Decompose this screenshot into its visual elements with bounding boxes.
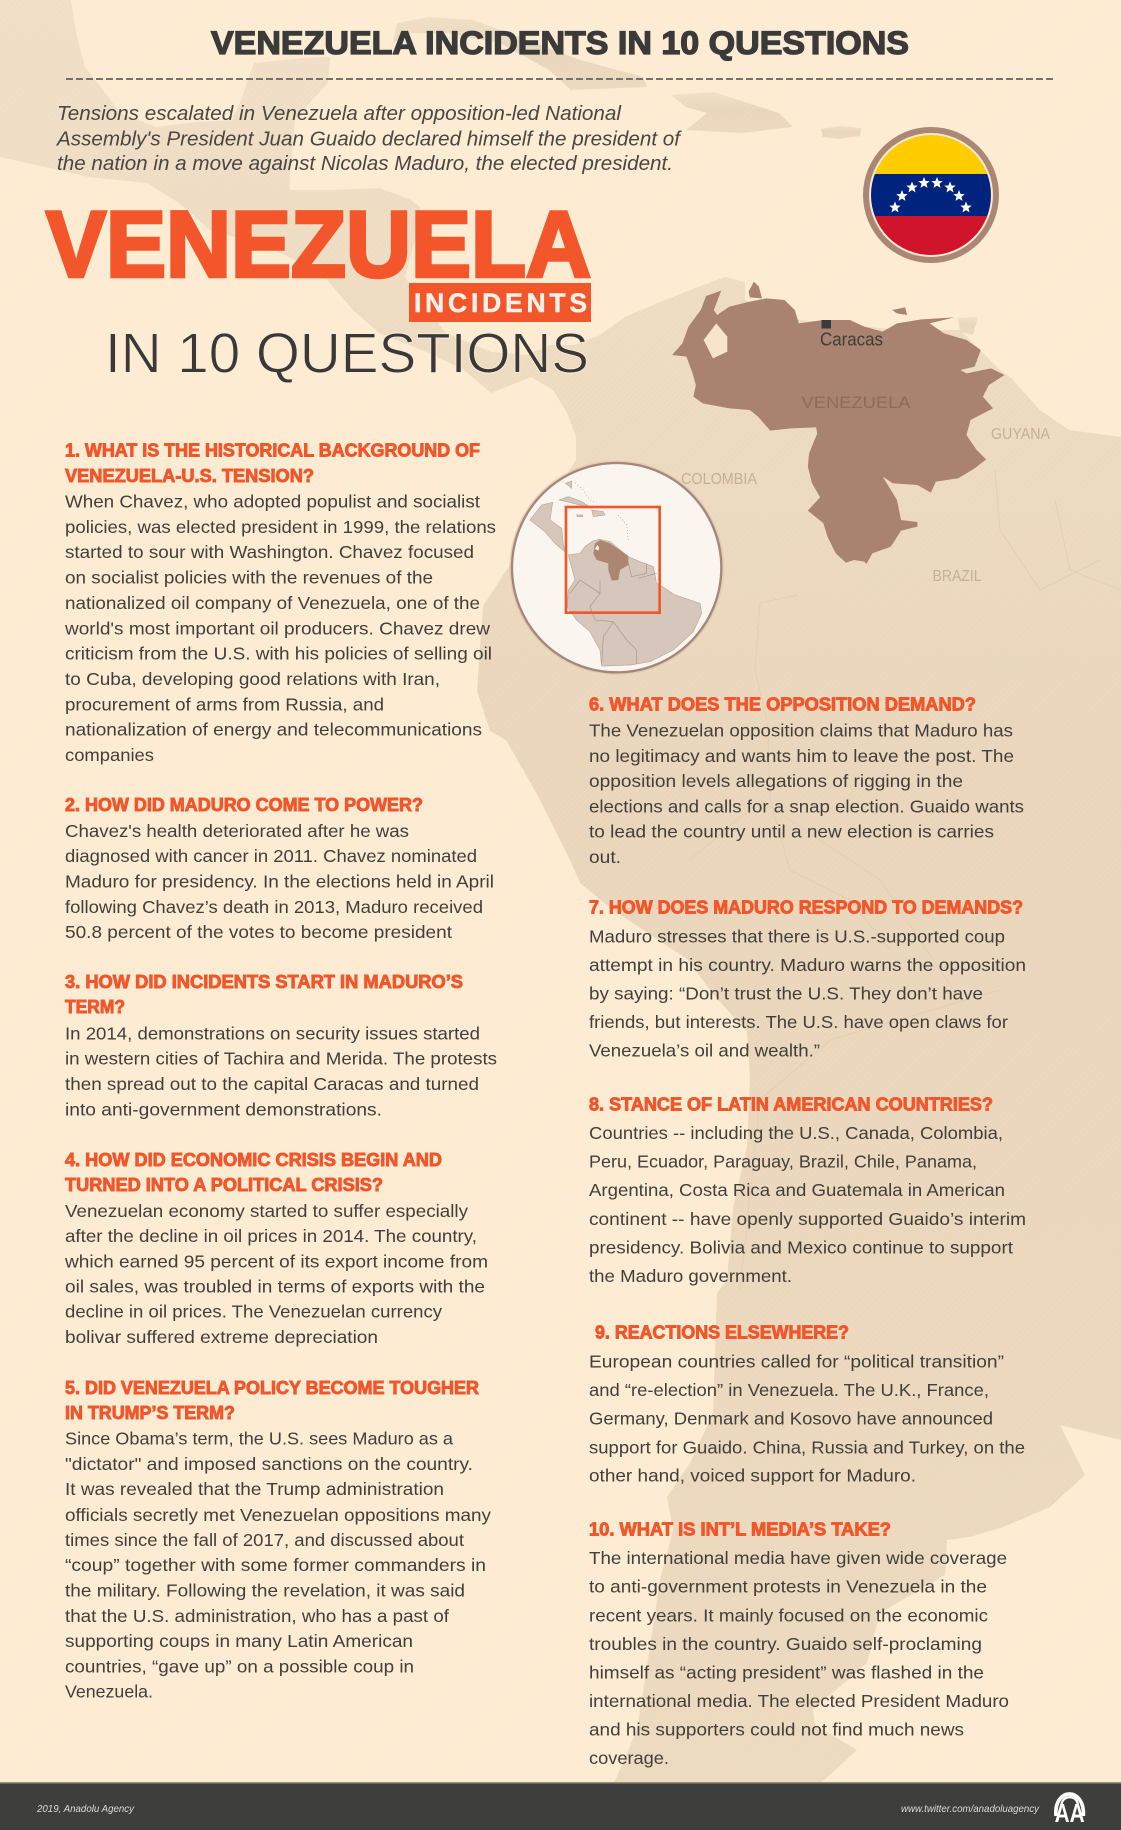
question 1: nationalized oil company of Venezuela, one of the <box>65 593 480 613</box>
footer bar <box>0 1782 1121 1830</box>
question 2: 50.8 percent of the votes to become president <box>65 922 452 942</box>
question 10 <box>589 1518 1009 1768</box>
question 1: 1. WHAT IS THE HISTORICAL BACKGROUND OF <box>65 440 480 460</box>
question 4: Venezuelan economy started to suffer especially <box>65 1201 468 1221</box>
question 5: IN TRUMP’S TERM? <box>65 1402 235 1423</box>
question 7: 7. HOW DOES MADURO RESPOND TO DEMANDS? <box>589 896 1023 917</box>
question 9: support for Guaido. China, Russia and Turkey, on the <box>589 1437 1025 1457</box>
question 6: no legitimacy and wants him to leave the post. The <box>589 746 1014 766</box>
map: Venezuela <box>672 282 1004 564</box>
question 6: elections and calls for a snap election. Guaido wants <box>589 796 1024 816</box>
label: Caracas: Caracas <box>820 330 883 350</box>
question 1: companies <box>65 745 154 765</box>
question 8: 8. STANCE OF LATIN AMERICAN COUNTRIES? <box>589 1094 993 1114</box>
question 4: 4. HOW DID ECONOMIC CRISIS BEGIN AND <box>65 1149 442 1170</box>
label: Colombia: COLOMBIA <box>681 471 758 488</box>
icon: Venezuelan flag <box>863 127 999 263</box>
question 7 <box>589 896 1026 1061</box>
question 10: and his supporters could not find much news <box>589 1719 964 1739</box>
intro text: Assembly's President Juan Guaido declared himself the president of <box>56 128 683 150</box>
question 2: 2. HOW DID MADURO COME TO POWER? <box>65 794 423 815</box>
question 4 <box>64 1149 488 1347</box>
question 2: diagnosed with cancer in 2011. Chavez nominated <box>65 846 477 866</box>
question 6: to lead the country until a new election is carries <box>589 822 994 842</box>
question 4: decline in oil prices. The Venezuelan currency <box>65 1302 442 1322</box>
intro text: Tensions escalated in Venezuela after opposition-led National <box>57 103 622 125</box>
question 2 <box>65 794 494 942</box>
footer url: www.twitter.com/anadoluagency <box>901 1803 1040 1815</box>
question 1: policies, was elected president in 1999, the relations <box>65 517 496 537</box>
question 1: criticism from the U.S. with his policies of selling oil <box>65 644 492 664</box>
question 5: Since Obama’s term, the U.S. sees Maduro as a <box>65 1429 453 1449</box>
map: country borders <box>690 470 1121 1290</box>
question 5: supporting coups in many Latin American <box>65 1631 413 1651</box>
question 5 <box>65 1377 491 1702</box>
question 6: opposition levels allegations of rigging in the <box>589 771 963 791</box>
question 10: coverage. <box>589 1748 669 1768</box>
question 1 <box>64 440 496 765</box>
question 5: the military. Following the revelation, it was said <box>65 1580 465 1600</box>
question 6: out. <box>589 847 621 867</box>
question 1: started to sour with Washington. Chavez focused <box>65 542 474 562</box>
label: Venezuela: VENEZUELA <box>802 393 911 412</box>
headline: In 10 Questions: IN 10 QUESTIONS <box>105 322 589 386</box>
title: VENEZUELA INCIDENTS IN 10 QUESTIONS <box>211 25 909 61</box>
label: Guyana: GUYANA <box>991 426 1051 443</box>
question 3 <box>65 971 497 1120</box>
question 8: presidency. Bolivia and Mexico continue to support <box>589 1237 1013 1257</box>
question 1: world's most important oil producers. Chavez drew <box>64 618 490 638</box>
question 7: Venezuela’s oil and wealth.” <box>589 1041 820 1061</box>
question 7: Maduro stresses that there is U.S.-supported coup <box>589 926 1005 946</box>
question 9: and “re-election” in Venezuela. The U.K., France, <box>589 1380 989 1400</box>
question 9: other hand, voiced support for Maduro. <box>589 1466 916 1486</box>
question 1: procurement of arms from Russia, and <box>65 694 384 714</box>
question 9: Germany, Denmark and Kosovo have announced <box>589 1409 993 1429</box>
question 7: by saying: “Don’t trust the U.S. They don’t have <box>589 984 983 1004</box>
question 10: himself as “acting president” was flashed in the <box>589 1662 984 1682</box>
question 1: on socialist policies with the revenues of the <box>65 568 433 588</box>
question 6 <box>589 694 1024 867</box>
question 2: Maduro for presidency. In the elections held in April <box>65 872 494 892</box>
question 8 <box>589 1094 1026 1286</box>
question 2: following Chavez’s death in 2013, Maduro received <box>65 897 483 917</box>
label: Brazil: BRAZIL <box>932 568 982 585</box>
question 4: oil sales, was troubled in terms of exports with the <box>65 1276 485 1296</box>
question 2: Chavez's health deteriorated after he was <box>65 821 409 841</box>
headline: Venezuela: VENEZUELA <box>46 192 591 296</box>
question 7: friends, but interests. The U.S. have open claws for <box>589 1012 1008 1032</box>
question 10: The international media have given wide coverage <box>589 1548 1007 1568</box>
question 4: which earned 95 percent of its export income from <box>64 1251 488 1271</box>
question 1: nationalization of energy and telecommunications <box>65 720 482 740</box>
intro text: the nation in a move against Nicolas Maduro, the elected president. <box>57 153 673 175</box>
question 3: into anti-government demonstrations. <box>65 1100 382 1120</box>
question 1: to Cuba, developing good relations with Iran, <box>65 669 440 689</box>
headline badge: Incidents: INCIDENTS <box>414 288 587 318</box>
question 8: the Maduro government. <box>589 1266 792 1286</box>
question 1: When Chavez, who adopted populist and socialist <box>65 492 480 512</box>
question 5: that the U.S. administration, who has a past of <box>65 1606 449 1626</box>
question 3: TERM? <box>65 996 125 1017</box>
intro text <box>56 103 683 175</box>
question 8: continent -- have openly supported Guaido’s interim <box>589 1209 1026 1229</box>
locator globe <box>509 460 724 675</box>
question 6: 6. WHAT DOES THE OPPOSITION DEMAND? <box>589 694 976 714</box>
question 10: recent years. It mainly focused on the economic <box>589 1605 988 1625</box>
question 3: in western cities of Tachira and Merida. The protests <box>65 1049 497 1069</box>
question 9: European countries called for “political transition” <box>589 1351 1004 1371</box>
question 3: then spread out to the capital Caracas and turned <box>65 1074 479 1094</box>
question 7: attempt in his country. Maduro warns the opposition <box>589 955 1026 975</box>
question 1: VENEZUELA-U.S. TENSION? <box>65 465 314 486</box>
question 5: times since the fall of 2017, and discussed about <box>65 1530 464 1550</box>
question 8: Peru, Ecuador, Paraguay, Brazil, Chile, Panama, <box>589 1152 977 1172</box>
question 8: Argentina, Costa Rica and Guatemala in American <box>589 1180 1005 1200</box>
question 4: bolivar suffered extreme depreciation <box>65 1327 378 1347</box>
question 9: 9. REACTIONS ELSEWHERE? <box>595 1322 849 1343</box>
question 6: The Venezuelan opposition claims that Maduro has <box>589 721 1013 741</box>
question 5: Venezuela. <box>65 1682 153 1702</box>
question 10: troubles in the country. Guaido self-proclaming <box>589 1634 982 1654</box>
question 10: to anti-government protests in Venezuela in the <box>589 1577 987 1597</box>
question 5: officials secretly met Venezuelan oppositions many <box>65 1505 491 1525</box>
icon: Anadolu Agency logo: AA <box>1055 1798 1085 1828</box>
question 4: TURNED INTO A POLITICAL CRISIS? <box>65 1174 383 1195</box>
question 5: countries, “gave up” on a possible coup in <box>65 1656 414 1676</box>
question 10: international media. The elected President Maduro <box>589 1691 1009 1711</box>
question 5: 5. DID VENEZUELA POLICY BECOME TOUGHER <box>65 1377 479 1398</box>
question 5: “coup” together with some former commanders in <box>65 1555 486 1575</box>
question 9 <box>589 1322 1025 1486</box>
question 3: In 2014, demonstrations on security issues started <box>65 1024 480 1044</box>
question 5: "dictator" and imposed sanctions on the country. <box>65 1454 473 1474</box>
question 5: It was revealed that the Trump administration <box>65 1479 444 1499</box>
Caracas marker <box>822 320 831 328</box>
question 10: 10. WHAT IS INT’L MEDIA’S TAKE? <box>589 1518 891 1539</box>
question 4: after the decline in oil prices in 2014. The country, <box>65 1226 477 1246</box>
footer credit: 2019, Anadolu Agency <box>36 1803 135 1815</box>
question 8: Countries -- including the U.S., Canada, Colombia, <box>589 1123 1003 1143</box>
question 3: 3. HOW DID INCIDENTS START IN MADURO’S <box>65 971 463 992</box>
